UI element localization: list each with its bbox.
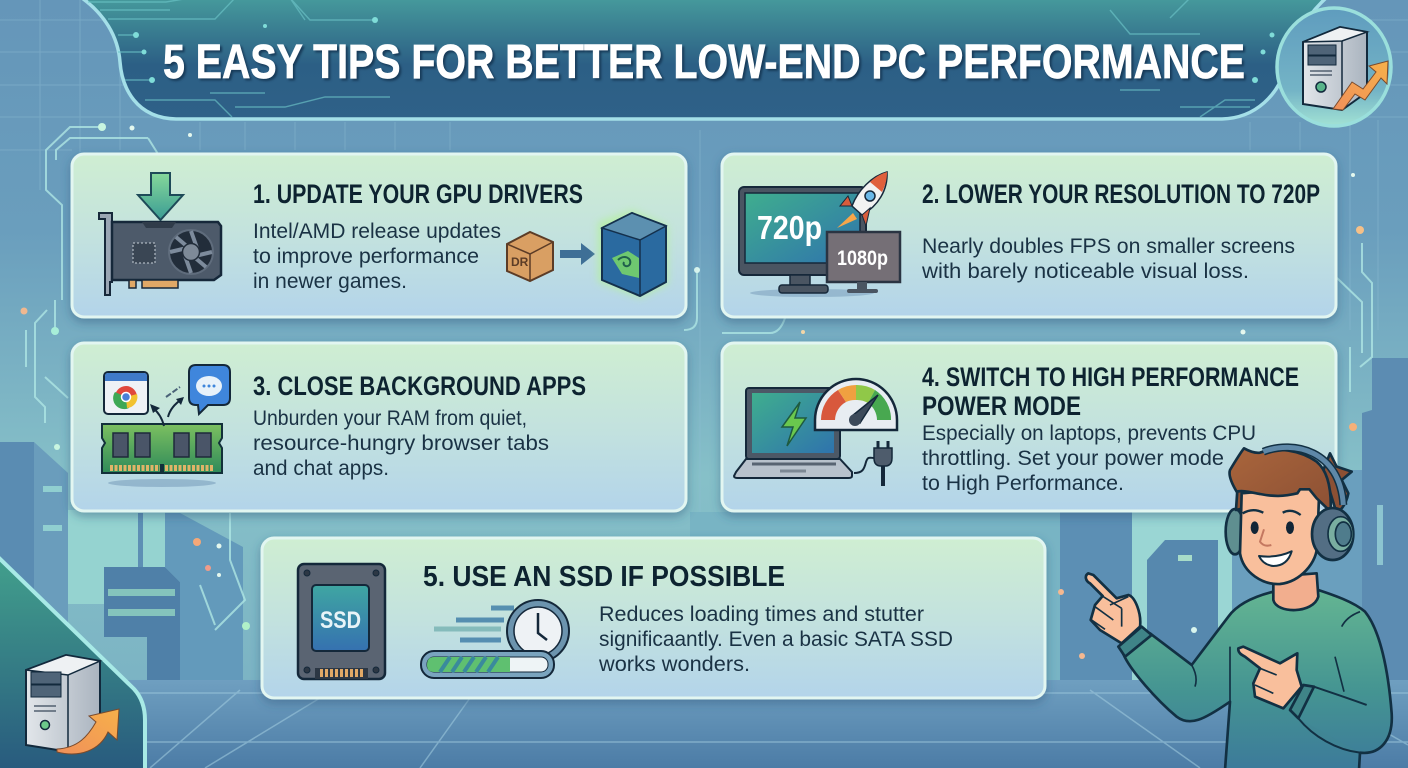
right headphone cup [1312, 508, 1353, 560]
icon: top-right PC tower with rising arrow [1277, 8, 1391, 126]
panel: tip 5 use an SSD [262, 538, 1045, 698]
eyebrows [1243, 510, 1301, 515]
banner circuit nodes [133, 17, 1274, 83]
background: tech grid [0, 0, 1408, 520]
hair [1230, 448, 1331, 512]
heading: 4. SWITCH TO HIGH PERFORMANCE [922, 362, 1299, 392]
title banner [82, 0, 1326, 119]
pointing hand left [1086, 573, 1140, 643]
body text: and chat apps. [253, 457, 389, 480]
background: glowing nodes [20, 123, 1364, 659]
corner panel: bottom-left [0, 556, 145, 768]
icon: driver box [507, 232, 553, 281]
sleeve creases [1192, 612, 1360, 703]
icon: monitors 720p vs 1080p with rocket: 720p [757, 209, 822, 246]
heading: POWER MODE [922, 391, 1081, 421]
heading [922, 362, 1299, 421]
body text [922, 422, 1256, 495]
panel: tip 3 close background apps [72, 343, 686, 511]
character: smiling man with headphones pointing [1086, 447, 1392, 768]
body text: Intel/AMD release updates [253, 220, 501, 243]
body text: throttling. Set your power mode [922, 447, 1224, 470]
body text [921, 235, 1295, 283]
icon: arrow to driver tower [560, 243, 595, 265]
icon: laptop with gauge and plug [734, 379, 897, 486]
background: city buildings [0, 358, 1408, 700]
side hair [1236, 490, 1244, 510]
icon: stopwatch with loading bar [421, 600, 569, 678]
icon: monitors 720p vs 1080p with rocket: 1080p [837, 247, 888, 270]
icon: SSD drive [298, 564, 385, 679]
body text [253, 220, 501, 293]
body text [253, 407, 549, 480]
right cuff [1290, 685, 1314, 718]
pointing hand right [1238, 647, 1302, 708]
icon: RAM stick with browser and chat apps [102, 365, 230, 487]
icon: SSD drive: SSD [320, 607, 361, 634]
headband fill [1263, 447, 1343, 505]
body text [598, 603, 953, 676]
body text: works wonders. [598, 653, 750, 676]
panel: tip 4 high performance power mode [722, 343, 1336, 511]
icon: GPU card with download arrow [99, 173, 221, 295]
background: perspective floor [0, 680, 1408, 768]
body text: with barely noticeable visual loss. [921, 260, 1249, 283]
left headphone cup [1226, 509, 1244, 554]
neck [1273, 573, 1318, 610]
icon: monitors 720p vs 1080p with rocket [739, 172, 900, 297]
panel: tip 2 lower resolution [722, 154, 1336, 317]
icon: glowing driver tower [598, 210, 668, 298]
body text: resource-hungry browser tabs [253, 432, 549, 455]
body text: in newer games. [253, 270, 407, 293]
background: circuit traces [26, 127, 1372, 630]
sweater with arms [1123, 590, 1392, 768]
headband [1263, 447, 1343, 505]
heading: 1. UPDATE YOUR GPU DRIVERS [253, 179, 583, 209]
body text: Especially on laptops, prevents CPU [922, 422, 1256, 445]
back hair tuft [1323, 453, 1352, 513]
icon: driver box: DR [511, 255, 529, 269]
icon: PC tower with orange arrow [26, 655, 119, 754]
face [1240, 487, 1319, 584]
body text: Unburden your RAM from quiet, [253, 407, 527, 430]
heading: 5. USE AN SSD IF POSSIBLE [423, 561, 785, 593]
body text: Reduces loading times and stutter [599, 603, 924, 626]
panel: tip 1 update GPU drivers [72, 154, 686, 317]
smile [1259, 551, 1292, 566]
body text: Nearly doubles FPS on smaller screens [922, 235, 1295, 258]
banner circuit traces [88, 0, 1255, 117]
nose [1260, 529, 1271, 546]
body text: significaantly. Even a basic SATA SSD [599, 628, 953, 651]
eyes [1251, 521, 1294, 534]
sleeve folds [1298, 687, 1367, 753]
left cuff [1118, 627, 1152, 657]
body text: to improve performance [253, 245, 479, 268]
body text: to High Performance. [922, 472, 1124, 495]
heading: 3. CLOSE BACKGROUND APPS [253, 371, 586, 401]
